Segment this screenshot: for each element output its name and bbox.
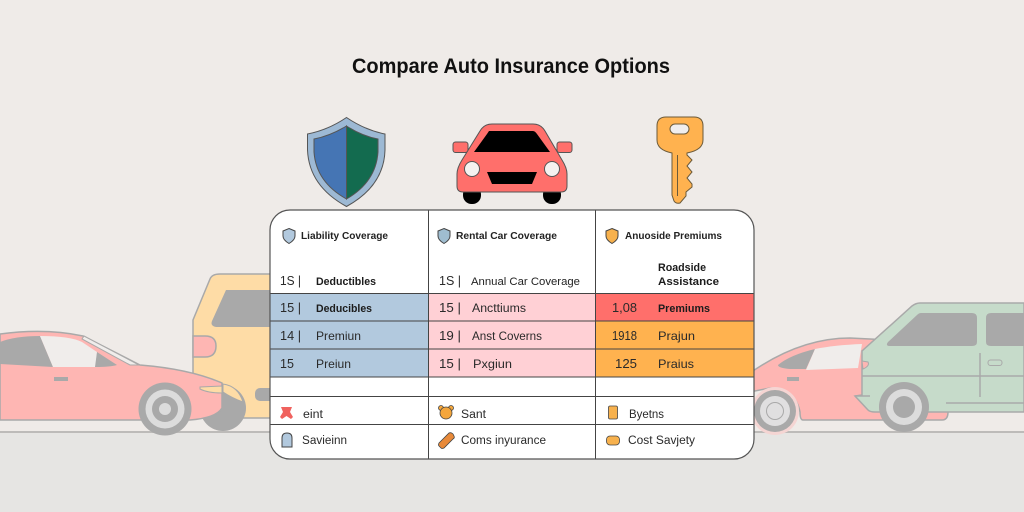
- icon: orange phone: [608, 406, 618, 419]
- row fill: premiums red: [595, 294, 754, 322]
- green van background right: [855, 303, 1024, 432]
- icon: shield: [308, 118, 385, 206]
- icon: red car: [453, 124, 572, 204]
- column 1 text: Premiun: [316, 329, 361, 343]
- column 1 text: Liability Coverage: [301, 231, 388, 242]
- column 2 text: Ancttiums: [472, 303, 526, 315]
- column 2 text: 19 |: [439, 329, 461, 343]
- icon: small shield blue: [283, 228, 295, 244]
- column 1 text: [280, 228, 388, 447]
- icon: key: [657, 117, 703, 203]
- column 3 text: Praius: [658, 357, 694, 371]
- column 1 text: Savieinn: [302, 435, 347, 447]
- column 3 text: 1918: [612, 329, 637, 343]
- column 1 text: 1S |: [280, 274, 301, 288]
- column 2 text: Anst Coverns: [472, 331, 542, 343]
- column 3 text: Premiums: [658, 303, 710, 315]
- column 3 text: Cost Savjety: [628, 435, 695, 447]
- column 2 text: 15 |: [439, 301, 461, 315]
- comparison table: [270, 210, 754, 459]
- icon: blue lock: [282, 433, 292, 447]
- title: Compare Auto Insurance Options: [352, 55, 670, 78]
- column 1 text: Deducibles: [316, 303, 372, 315]
- column 2 text: Pxgiun: [473, 359, 512, 371]
- icon: orange bear: [438, 406, 454, 419]
- column 1 text: 15: [280, 357, 294, 371]
- column 3 text: Assistance: [658, 276, 719, 288]
- icon: orange tag: [438, 433, 454, 448]
- column 1 text: 14 |: [280, 329, 301, 343]
- column 1 text: Deductibles: [316, 276, 376, 288]
- column 2 text: Annual Car Coverage: [471, 276, 580, 288]
- row fills: premiums orange: [595, 322, 754, 377]
- column 1 text: Preiun: [316, 357, 351, 371]
- icon: red cross mark: [280, 407, 293, 419]
- yellow vehicle background left: [193, 274, 275, 431]
- column 2 text: Sant: [461, 409, 487, 421]
- icon: orange coupon: [606, 436, 620, 445]
- column 2 text: [438, 228, 580, 448]
- row fills: rental column: [428, 294, 595, 377]
- icon: small shield gold: [606, 228, 618, 244]
- column 3 text: 125: [615, 357, 637, 371]
- column 1 text: 15 |: [280, 301, 301, 315]
- column 1 text: eint: [303, 409, 324, 421]
- red car background left: [0, 331, 243, 436]
- column 2 text: 15 |: [439, 357, 461, 371]
- column 3 text: Roadside: [658, 262, 706, 274]
- column 2 text: Coms inyurance: [461, 435, 546, 447]
- column 2 text: Rental Car Coverage: [456, 231, 557, 242]
- column 3 text: Anuoside Premiums: [625, 231, 722, 242]
- column 3 text: Prajun: [658, 329, 695, 343]
- column 3 text: Byetns: [629, 409, 664, 421]
- column 3 text: 1,08: [612, 301, 637, 315]
- row fills: liability column: [270, 294, 428, 377]
- red car background right: [750, 338, 948, 435]
- icon: small shield teal: [438, 228, 450, 244]
- column 2 text: 1S |: [439, 274, 461, 288]
- ground: [0, 431, 1024, 512]
- column 3 text: [606, 228, 722, 447]
